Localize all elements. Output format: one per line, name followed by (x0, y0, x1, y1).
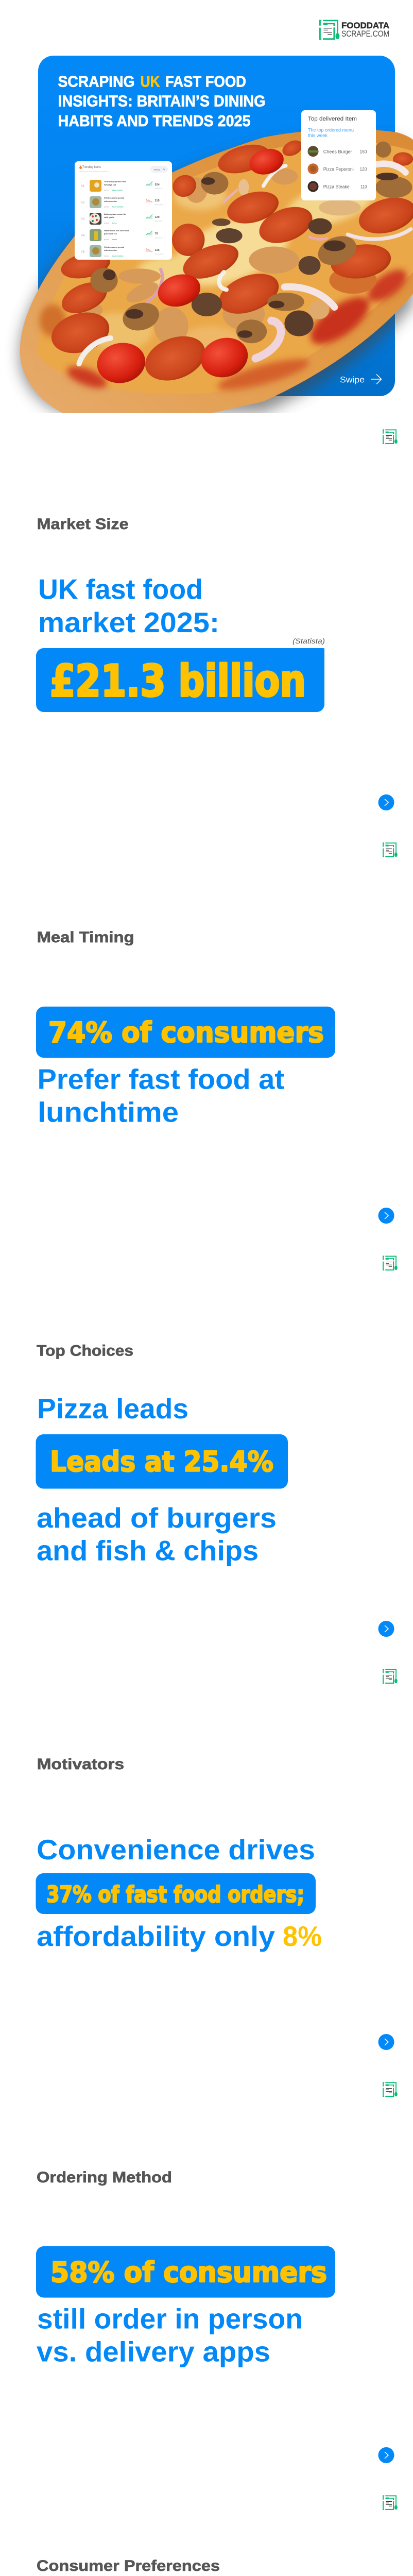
arrow button (378, 2034, 394, 2050)
row 4: DRINK (112, 239, 117, 241)
callout: 37% of fast food orders: 37% of fast food orders; (46, 1882, 304, 1908)
row 5: #5 (81, 250, 85, 254)
callout: 58% of consumers: 58% of consumers (50, 2256, 327, 2289)
mushrooms (90, 142, 412, 343)
icon: flame (79, 165, 82, 169)
card: top delivered item (301, 110, 376, 200)
row 3: with garlic (104, 216, 115, 218)
arrow button (378, 794, 394, 810)
icon: logo mark, market size (383, 429, 398, 444)
row 3 (81, 213, 162, 225)
title: hero heading: FAST FOOD (165, 72, 246, 90)
row 2: Chicken curry special (104, 197, 124, 199)
text: UK fast food market: UK fast food (38, 573, 203, 605)
text: affordability only 8%: affordability only (37, 1920, 275, 1952)
arrow button (378, 1621, 394, 1637)
row 2 (81, 196, 163, 208)
icon: logo mark, meal timing (383, 842, 398, 857)
arrow button (378, 2447, 394, 2463)
text: UK fast food market (38, 573, 219, 638)
row 3: #3 (81, 217, 85, 221)
row 1 (81, 180, 163, 192)
pepperoni (47, 137, 413, 388)
tomatoes (94, 145, 286, 387)
text: still order in person vs delivery apps (37, 2303, 303, 2368)
title: hero heading (58, 72, 266, 130)
card: trending items: Weekly (154, 169, 160, 171)
callout: 74% of consumers (36, 1007, 335, 1058)
card: trending items (75, 161, 172, 260)
row 3: 120 (154, 216, 160, 219)
text: prefer fast food at lunchtime: Prefer fast food at (37, 1063, 284, 1095)
icon: logo mark, consumer preferences (383, 2495, 398, 2510)
icon: logo mark, top choices (383, 1256, 398, 1270)
item: pizza steake: Pizza Steake (323, 184, 350, 190)
callout: 37% of fast food orders (36, 1873, 316, 1914)
card: top delivered item: Top delivered Item (308, 116, 357, 122)
row 2: $14.30 (104, 206, 109, 208)
item: pizza peperoni: Pizza Peperoni (323, 166, 354, 172)
row 1: MAIN COURSE (112, 190, 123, 192)
text: ahead of burgers and fish and chips: and fish & chips (37, 1535, 259, 1567)
logo: header FoodData Scrape: SCRAPE.COM (341, 29, 389, 39)
row 5: $14.30 (104, 255, 109, 257)
item: burger: Chees Burger (323, 149, 352, 155)
onion slices (79, 164, 411, 364)
logo: header FoodData Scrape (319, 20, 389, 40)
card: trending items: Lorem ipsum dolor sit amet, consectetur (79, 171, 108, 173)
row 4: 78 (154, 232, 158, 235)
row 1: #1 (81, 184, 85, 188)
text: affordability only 8%: 8% (283, 1920, 322, 1952)
swipe prompt (340, 374, 381, 385)
card: top delivered item: this week (308, 133, 328, 139)
heading: meal timing: Meal Timing (37, 929, 134, 946)
slide: top choices (36, 1256, 398, 1637)
row 4: Watermelon mix chocolate (104, 229, 130, 232)
logo: header FoodData Scrape: FOODDATA (341, 21, 389, 30)
callout: 21.3 billion (36, 648, 324, 712)
text: ahead of burgers and fish and chips: ahead of burgers (37, 1502, 277, 1534)
row 5: Sales (-2%) (154, 253, 163, 255)
slide: meal timing (36, 842, 398, 1224)
row 3: $14.30 (104, 222, 109, 224)
row 5: with cucumber (104, 249, 117, 251)
text: prefer fast food at lunchtime: lunchtime (38, 1096, 179, 1128)
title: hero heading: HABITS AND TRENDS 2025 (58, 112, 250, 130)
row 5: MAIN COURSE (112, 255, 123, 257)
icon: logo mark, motivators (383, 1669, 398, 1684)
heading: consumer preferences: Consumer Preferences (37, 2557, 220, 2574)
row 4 (81, 229, 163, 241)
row 4: Sales (12%) (154, 237, 163, 239)
item: pizza steake (308, 181, 367, 192)
text: ahead of burgers and fish and chips (37, 1502, 277, 1567)
row 2: Sales (-2%) (154, 204, 163, 206)
callout: leads at 25.4% (36, 1434, 288, 1489)
row 2: MAIN COURSE (112, 206, 123, 208)
source note: (Statista) (292, 637, 325, 645)
item: pizza peperoni (308, 163, 367, 174)
item: burger: 150 (359, 149, 367, 155)
text: UK fast food market: market 2025: (38, 606, 219, 638)
row 2: 215 (154, 199, 160, 202)
slide: ordering method (36, 2082, 398, 2463)
arrow button (378, 1208, 394, 1224)
slide: hero (10, 20, 413, 413)
swipe prompt: Swipe (340, 375, 365, 385)
text: prefer fast food at lunchtime (37, 1063, 284, 1128)
slide: consumer preferences (37, 2495, 398, 2574)
icon: logo mark, ordering method (383, 2082, 398, 2097)
text: convenience drives: Convenience drives (37, 1834, 315, 1866)
row 5 (81, 245, 163, 257)
slide: motivators (36, 1669, 398, 2050)
heading: top choices: Top Choices (37, 1343, 133, 1360)
row 5: 215 (154, 249, 160, 252)
row 1: 524 (154, 183, 160, 187)
callout: 21.3 billion: £21.3 billion (50, 656, 306, 707)
card: trending items: Trending Items (82, 166, 101, 169)
text: still order in person vs delivery apps: vs. delivery apps (37, 2336, 270, 2368)
title: hero heading: INSIGHTS: BRITAIN’S DINING (58, 92, 266, 110)
row 4: $14.30 (104, 239, 109, 241)
item: pizza steake: 110 (360, 184, 367, 190)
callout: 58% of consumers (36, 2246, 335, 2298)
heading: ordering method: Ordering Method (37, 2169, 172, 2186)
row 4: juice with ice (104, 232, 117, 235)
item: burger (308, 146, 367, 157)
row 3: PIZZA (112, 222, 117, 224)
illustration: pepperoni pizza (20, 129, 413, 413)
row 3: Sales (6%) (154, 220, 162, 222)
text: still order in person vs delivery apps: still order in person (37, 2303, 303, 2335)
row 5: Chicken curry special (104, 246, 124, 248)
row 1: $10.30 (104, 190, 109, 192)
row 2: #2 (81, 201, 85, 205)
slide: market size (36, 429, 398, 810)
row 1: Sales (12%) (154, 188, 163, 190)
row 4: #4 (81, 234, 85, 238)
callout: 74% of consumers: 74% of consumers (48, 1016, 324, 1049)
panel: hero blue card (38, 56, 395, 396)
row 1: Tuna soup spinach with (104, 180, 127, 182)
card: top delivered item: The top ordered menu (308, 128, 354, 133)
chicken pieces (79, 168, 376, 345)
title: hero heading: UK (141, 72, 160, 90)
item: pizza peperoni: 120 (359, 166, 367, 172)
heading: market size: Market Size (37, 516, 129, 533)
row 1: himalaya salt (104, 183, 116, 186)
title: hero heading: SCRAPING (58, 72, 135, 90)
heading: motivators: Motivators (37, 1756, 124, 1773)
row 2: with cucumber (104, 200, 117, 202)
row 3: Italiano pizza mozarella (104, 213, 126, 215)
text: pizza leads: Pizza leads (37, 1393, 188, 1425)
callout: leads at 25.4%: Leads at 25.4% (50, 1446, 273, 1478)
